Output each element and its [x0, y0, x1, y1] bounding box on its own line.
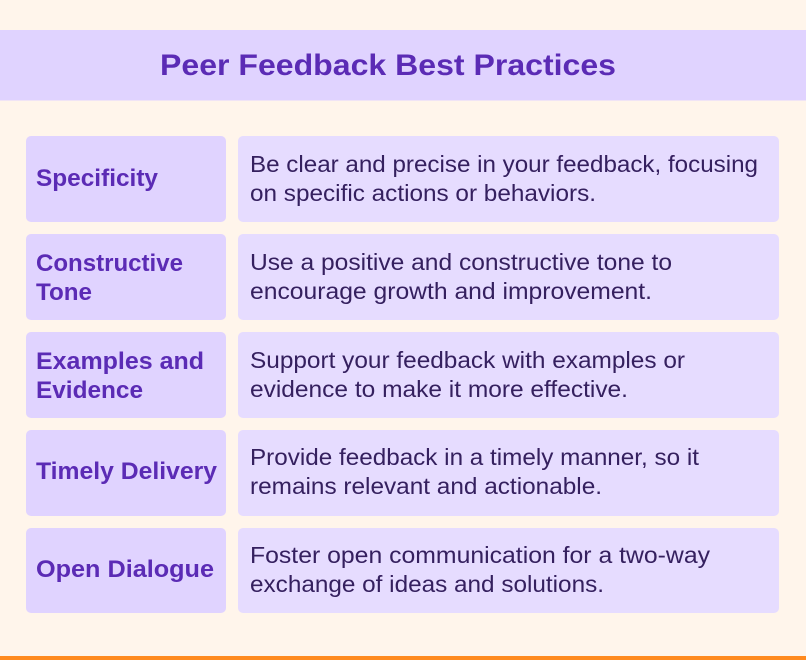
row: specificity [26, 136, 779, 222]
row: constructive tone: encourage growth and improvement. [250, 278, 652, 304]
row: examples and evidence: Examples and [36, 348, 204, 375]
row: specificity: on specific actions or behaviors. [250, 180, 596, 206]
row: examples and evidence [26, 332, 779, 418]
row: constructive tone: Constructive [36, 250, 183, 277]
row: constructive tone [26, 234, 779, 320]
row: examples and evidence: Evidence [36, 377, 143, 404]
row: examples and evidence: evidence to make it more effective. [250, 376, 628, 402]
row: timely delivery: Timely Delivery [36, 458, 218, 485]
row: specificity: Specificity [36, 165, 159, 192]
row: timely delivery: Provide feedback in a timely manner, so it [250, 444, 700, 470]
row: examples and evidence: Support your feedback with examples or [250, 347, 685, 373]
title: Peer Feedback Best Practices [160, 49, 616, 82]
footer bar [0, 656, 806, 660]
row: open dialogue [26, 528, 779, 613]
row: constructive tone: Tone [36, 279, 92, 306]
row: open dialogue: Foster open communication for a two-way [250, 542, 711, 568]
row: timely delivery: remains relevant and actionable. [250, 473, 602, 499]
table of practices [26, 136, 779, 613]
title banner [0, 30, 806, 100]
row: constructive tone: Use a positive and constructive tone to [250, 249, 672, 275]
row: open dialogue: Open Dialogue [36, 556, 214, 583]
row: open dialogue: exchange of ideas and solutions. [250, 571, 604, 597]
row: specificity: Be clear and precise in your feedback, focusing [250, 151, 758, 177]
row: timely delivery [26, 430, 779, 516]
